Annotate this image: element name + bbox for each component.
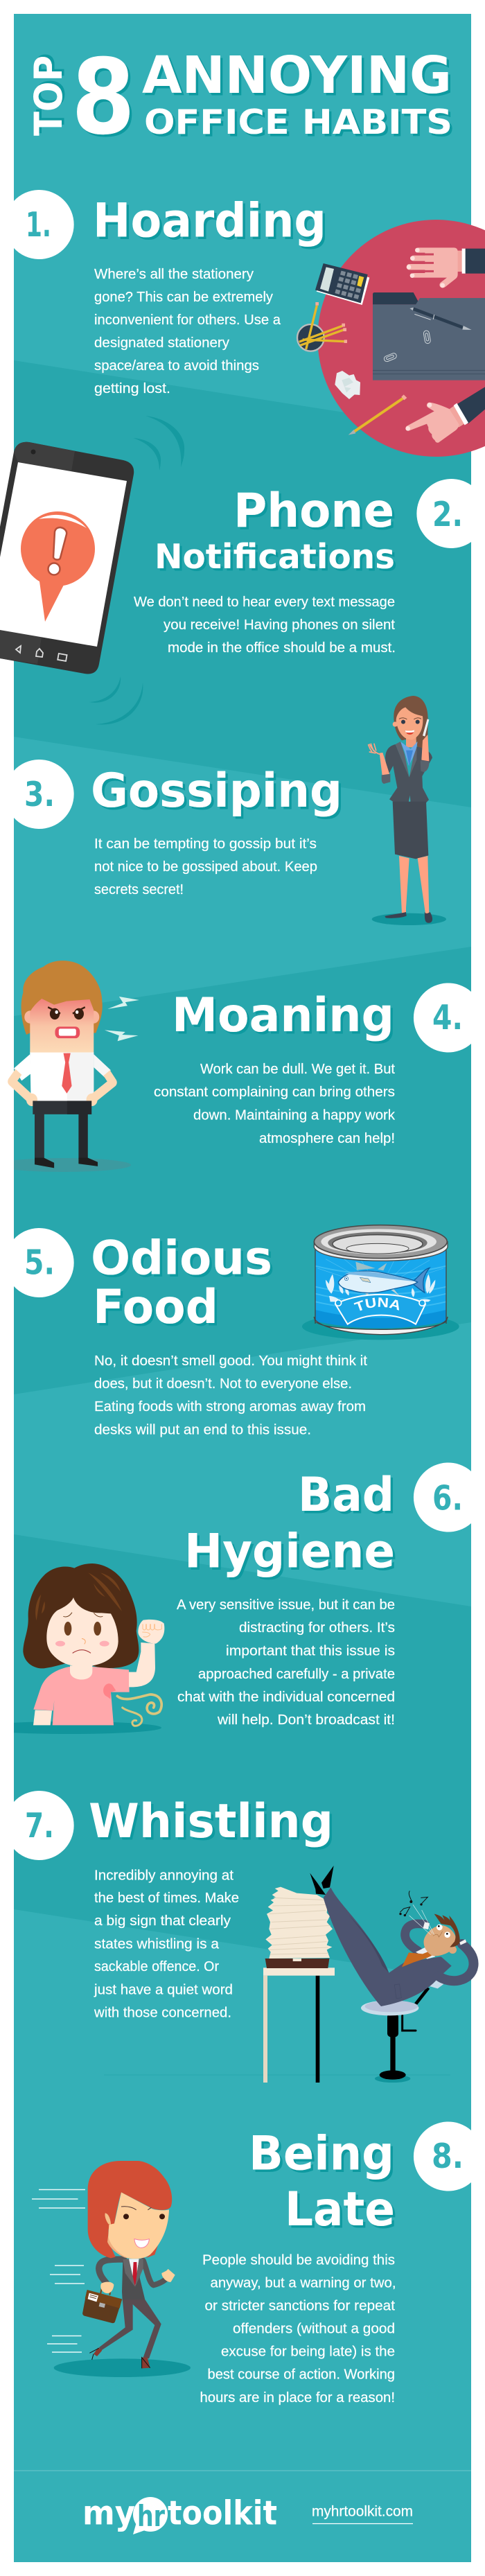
section 8: being late (32, 2121, 471, 2406)
text: whistling description: just have a quiet word (94, 1982, 233, 1997)
heading: Bad Hygiene: Hygiene (184, 1525, 395, 1579)
heading: Moaning: Moaning (172, 988, 394, 1043)
text: being late description: offenders (without a good (233, 2320, 395, 2337)
heading: Being Late: Late (285, 2182, 395, 2237)
section 4: moaning (0, 961, 471, 1172)
heading: Being Late (249, 2126, 395, 2237)
heading: Gossiping: Gossiping (91, 764, 342, 818)
illustration: angry man shadow (14, 1158, 131, 1172)
text: hoarding description: space/area to avoid things (94, 358, 259, 374)
text: whistling description (94, 1867, 239, 2021)
text: odious food description: Eating foods with strong aromas away from (94, 1399, 366, 1414)
illustration: woman running late (54, 2161, 191, 2377)
section 5: odious food (14, 1224, 459, 1437)
number badge 3: 3. (24, 775, 55, 814)
text: hygiene description: A very sensitive issue, but it can be (177, 1597, 395, 1613)
text: odious food description: desks will put an end to this issue. (94, 1422, 311, 1437)
text: hoarding description: Where’s all the stationery (94, 266, 254, 282)
number badge 1 (14, 190, 74, 259)
title: TOP (26, 55, 71, 136)
text: whistling description: states whistling is a (94, 1936, 220, 1952)
number badge 5: 5. (24, 1243, 55, 1282)
icon: vibration arcs (89, 416, 184, 725)
text: moaning description: atmosphere can help! (259, 1130, 395, 1146)
heading: Phone Notifications: Phone (233, 484, 394, 538)
section 6: bad hygiene (0, 1462, 471, 1734)
text: odious food description (94, 1353, 367, 1437)
number badge 7: 7. (25, 1806, 54, 1846)
title: 8 (71, 37, 135, 158)
text: gossiping description: not nice to be gossiped about. Keep (94, 859, 317, 875)
text: hoarding description: gone? This can be extremely (94, 289, 274, 305)
text: being late description (200, 2252, 396, 2406)
text: odious food description: does, but it doesn’t. Not to everyone else. (94, 1376, 352, 1392)
number badge 2 (416, 479, 471, 548)
number badge 6: 6. (432, 1479, 463, 1518)
text: phone description: mode in the office should be a must. (168, 640, 396, 656)
illustration: shadow under girl (0, 1721, 161, 1734)
text: hygiene description: chat with the individual concerned (177, 1689, 395, 1705)
heading: Whistling: Whistling (89, 1794, 333, 1849)
heading: Odious Food: Food (93, 1280, 218, 1335)
text: moaning description: Work can be dull. We get it. But (200, 1061, 395, 1077)
illustration: woman on phone (369, 696, 446, 925)
text: being late description: anyway, but a warning or two, (211, 2275, 396, 2291)
heading: Hoarding: Hoarding (93, 194, 326, 248)
number badge 6 (414, 1462, 471, 1532)
heading: Bad Hygiene (184, 1468, 395, 1579)
number badge 3 (14, 760, 74, 829)
text: moaning description (154, 1061, 396, 1146)
heading: Odious Food (91, 1231, 272, 1335)
footer: logo: toolkit (168, 2494, 277, 2532)
text: hygiene description: important that this issue is (226, 1642, 395, 1659)
text: gossiping description: It can be tempting to gossip but it’s (94, 836, 317, 852)
speed lines (32, 2190, 85, 2352)
heading: Being Late: Being (249, 2126, 394, 2182)
section 2: phone notifications (0, 416, 471, 725)
text: whistling description: with those concerned. (94, 2004, 231, 2021)
heading: Phone Notifications: Notifications (155, 537, 395, 577)
text: hoarding description (94, 266, 281, 396)
number badge 5 (14, 1228, 74, 1297)
text: phone description: you receive! Having phones on silent (164, 617, 395, 633)
text: being late description: excuse for being late) is the (221, 2344, 395, 2359)
illustration: desk with folder, hands and stationery (297, 220, 485, 457)
number badge 1: 1. (26, 205, 51, 245)
text: moaning description: constant complaining can bring others (154, 1084, 395, 1100)
text: being late description: People should be avoiding this (202, 2252, 395, 2268)
text: whistling description: Incredibly annoying at (94, 1867, 233, 1884)
number badge 2: 2. (432, 495, 463, 534)
title: OFFICE HABITS (144, 103, 452, 142)
number badge 4 (414, 983, 471, 1052)
icon: smartphone with alert bubble (0, 442, 134, 674)
text: hygiene description: approached carefully - a private (198, 1666, 395, 1682)
text: being late description: or stricter sanctions for repeat (205, 2298, 395, 2313)
text: hoarding description: inconvenient for others. Use a (94, 312, 281, 328)
icon: hr speech bubble: hr (137, 2499, 165, 2533)
section 3: gossiping (14, 696, 446, 925)
illustration: tuna can: TUNA (353, 1297, 399, 1311)
title: ANNOYING (142, 46, 452, 105)
section 7: whistling (14, 1791, 474, 2083)
text: whistling description: the best of times. Make (94, 1890, 239, 1906)
illustration: angry man (12, 961, 139, 1168)
footer: logo: my (82, 2494, 135, 2532)
text: hoarding description: getting lost. (94, 380, 170, 396)
text: hygiene description (177, 1597, 395, 1728)
text: gossiping description: secrets secret! (94, 882, 184, 897)
text: being late description: hours are in place for a reason! (200, 2390, 395, 2406)
alert bubble (21, 511, 95, 622)
title (26, 37, 452, 158)
number badge 7 (14, 1791, 74, 1860)
illustration: girl with smelly armpit (23, 1563, 164, 1726)
text: hoarding description: designated stationery (94, 335, 230, 351)
number badge 8: 8. (432, 2137, 464, 2176)
number badge 4: 4. (432, 998, 463, 1037)
text: being late description: best course of action. Working (208, 2366, 395, 2383)
text: hygiene description: distracting for others. It’s (239, 1620, 395, 1636)
section 1: hoarding (14, 190, 485, 457)
text: phone description: We don’t need to hear every text message (134, 594, 395, 610)
text: gossiping description (94, 836, 317, 897)
footer: website link: myhrtoolkit.com (312, 2503, 413, 2520)
text: whistling description: a big sign that clearly (94, 1913, 231, 1929)
heading: Odious Food: Odious (91, 1231, 272, 1286)
text: hygiene description: will help. Don’t broadcast it! (217, 1712, 395, 1728)
text: odious food description: No, it doesn’t smell good. You might think it (94, 1353, 367, 1369)
text: moaning description: down. Maintaining a happy work (193, 1107, 396, 1123)
number badge 8 (414, 2121, 471, 2191)
footer: logo (82, 2494, 277, 2534)
text: phone description (134, 594, 396, 656)
heading: Bad Hygiene: Bad (298, 1468, 394, 1523)
heading: Phone Notifications (155, 484, 395, 577)
text: whistling description: sackable offence. Or (94, 1959, 219, 1974)
illustration: tuna can (302, 1224, 459, 1340)
illustration: man whistling with feet on desk (263, 1866, 474, 2083)
